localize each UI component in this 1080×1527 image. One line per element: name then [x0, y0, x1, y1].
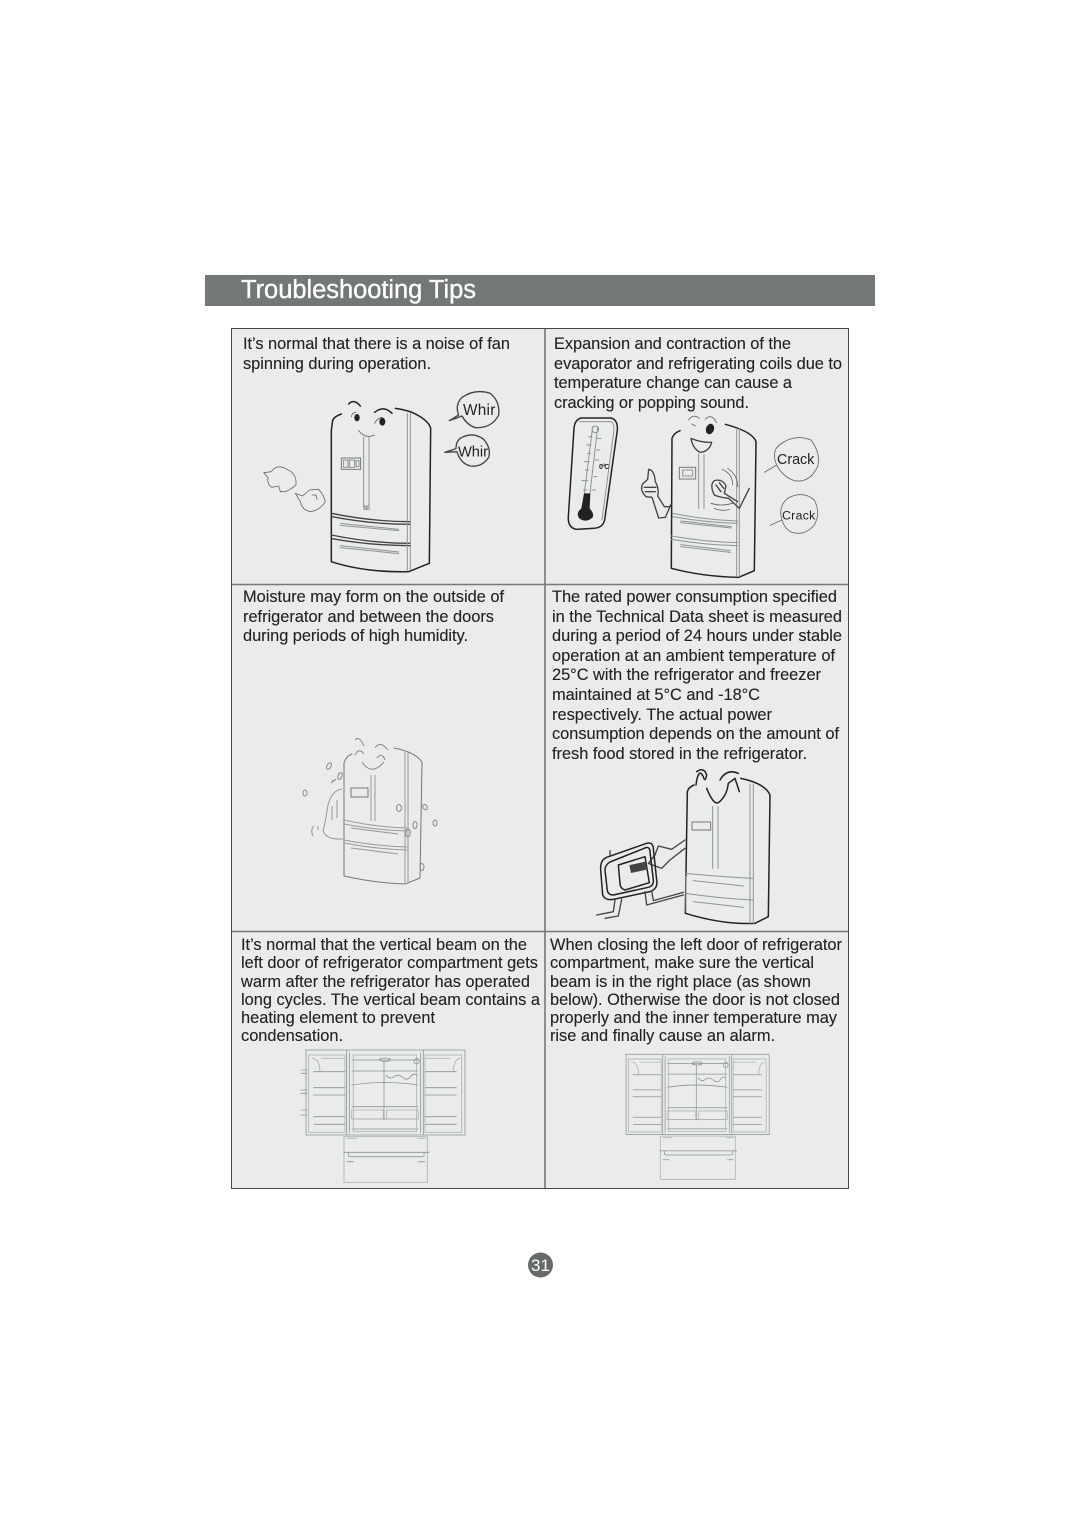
panel: vertical beam warm [240, 936, 541, 1182]
text: closing left door: properly and the inner temperature may [550, 1009, 838, 1027]
text: cracking sound: Expansion and contraction of the [554, 335, 791, 353]
panel: fan noise [243, 335, 510, 572]
text: closing left door: compartment, make sure the vertical [550, 954, 814, 972]
text: vertical beam warm: warm after the refrigerator has operated [240, 973, 530, 991]
illustration: thermometer [568, 418, 617, 529]
text: cracking sound: evaporator and refrigerating coils due to [554, 355, 842, 373]
title bar: Troubleshooting Tips [241, 276, 476, 304]
panel: power consumption [552, 588, 842, 924]
illustration: fan noise fridge: Whir [458, 445, 488, 461]
text: power consumption: respectively. The actual power [552, 706, 773, 724]
illustration: moisture fridge [303, 738, 437, 884]
illustration: cracking fridge: Crack [782, 508, 816, 522]
illustration: fan noise fridge [264, 392, 499, 572]
text: vertical beam warm: condensation. [241, 1027, 343, 1045]
illustration: open fridge right [625, 1054, 769, 1179]
text: cracking sound: cracking or popping sound. [554, 394, 749, 412]
illustration: open fridge left [301, 1050, 465, 1182]
panel: cracking sound [554, 335, 842, 577]
text: moisture: during periods of high humidity. [243, 627, 468, 645]
illustration: thermometer: 0°C [599, 463, 609, 471]
illustration: cracking fridge [642, 416, 818, 577]
text: moisture: refrigerator and between the doors [243, 608, 494, 626]
text: vertical beam warm: long cycles. The vertical beam contains a [241, 991, 541, 1009]
text: power consumption: fresh food stored in the refrigerator. [552, 745, 807, 763]
page number [528, 1252, 553, 1278]
text: moisture: Moisture may form on the outside of [243, 588, 504, 606]
text: moisture [243, 588, 504, 645]
illustration: cracking fridge: Crack [777, 452, 815, 468]
text: power consumption: 25°C with the refrigerator and freezer [552, 666, 822, 684]
text: cracking sound: temperature change can cause a [554, 374, 793, 392]
text: power consumption: in the Technical Data sheet is measured [552, 608, 842, 626]
text: cracking sound [554, 335, 842, 412]
text: closing left door: below). Otherwise the door is not closed [550, 991, 840, 1009]
text: vertical beam warm: heating element to prevent [241, 1009, 435, 1027]
text: closing left door: beam is in the right place (as shown [550, 973, 811, 991]
text: fan noise [243, 335, 510, 373]
text: vertical beam warm [240, 936, 541, 1045]
panel: closing left door [550, 936, 843, 1179]
illustration: fridge and power meter [597, 770, 770, 924]
text: fan noise: It’s normal that there is a noise of fan [243, 335, 510, 353]
text: closing left door: When closing the left door of refrigerator [550, 936, 843, 954]
text: closing left door [550, 936, 843, 1045]
panel: moisture [243, 588, 504, 884]
panel grid [232, 328, 848, 1188]
text: vertical beam warm: It’s normal that the vertical beam on the [241, 936, 527, 954]
page number: 31 [531, 1256, 550, 1275]
text: power consumption: maintained at 5°C and -18°C [552, 686, 760, 704]
text: power consumption: consumption depends on the amount of [552, 725, 839, 743]
text: power consumption: operation at an ambient temperature of [552, 647, 835, 665]
text: vertical beam warm: left door of refrigerator compartment gets [241, 954, 538, 972]
text: power consumption: The rated power consumption specified [552, 588, 837, 606]
text: power consumption: during a period of 24 hours under stable [552, 627, 842, 645]
text: power consumption [552, 588, 842, 763]
text: fan noise: spinning during operation. [243, 355, 431, 373]
text: closing left door: rise and finally cause an alarm. [550, 1027, 775, 1045]
title bar [205, 275, 875, 306]
illustration: fan noise fridge: Whir [463, 402, 495, 419]
